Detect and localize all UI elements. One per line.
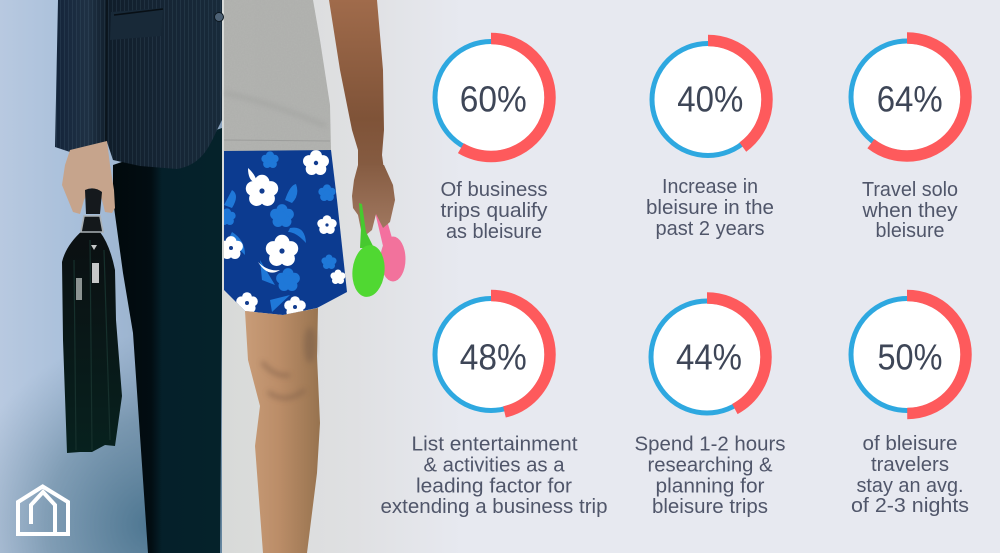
green toy scoop — [350, 203, 387, 299]
left hand — [62, 141, 115, 214]
icon: house logo — [18, 486, 68, 534]
caption 40%: past 2 years — [656, 218, 764, 240]
caption 48%: extending a business trip — [380, 496, 608, 518]
caption 40%: bleisure in the — [646, 197, 774, 219]
blue wall — [0, 0, 222, 553]
caption 50%: of 2-3 nights — [851, 495, 969, 517]
ring 60% — [432, 38, 550, 156]
jacket pocket — [110, 8, 163, 40]
white flowers — [219, 150, 346, 317]
value 64%: 64% — [877, 78, 943, 120]
caption 60%: Of business — [440, 179, 548, 201]
right arm — [329, 0, 384, 170]
stat: 44% — [634, 298, 786, 518]
suit jacket — [55, 0, 224, 169]
caption 44%: Spend 1-2 hours — [634, 434, 786, 456]
value 60%: 60% — [460, 78, 527, 120]
caption 48% — [380, 434, 608, 518]
value 44%: 44% — [676, 336, 742, 377]
caption 64%: when they — [861, 200, 958, 222]
caption 50%: travelers — [871, 454, 949, 476]
briefcase — [62, 188, 122, 453]
stat: 48% — [380, 296, 608, 518]
jacket button — [214, 12, 224, 22]
caption 64%: bleisure — [876, 220, 944, 242]
caption 40%: Increase in — [662, 176, 758, 198]
caption 44%: bleisure trips — [652, 496, 768, 518]
caption 50%: stay an avg. — [856, 475, 964, 497]
caption 50%: of bleisure — [862, 433, 958, 455]
photo: business and beach halves — [0, 0, 406, 553]
light wall — [222, 0, 462, 553]
caption 44% — [634, 434, 786, 518]
caption 60%: as bleisure — [446, 221, 542, 243]
zipper pulls — [76, 245, 99, 300]
value 48%: 48% — [460, 336, 527, 377]
bare leg — [245, 308, 320, 553]
caption 48%: List entertainment — [412, 434, 578, 456]
stat: 64% — [848, 38, 966, 242]
swim shorts — [218, 150, 349, 317]
caption 60%: trips qualify — [440, 200, 548, 222]
caption 48%: leading factor for — [416, 476, 572, 498]
stat: 40% — [646, 40, 774, 240]
pink toy scoop — [375, 210, 406, 282]
ring 50% — [848, 296, 966, 414]
caption 64% — [861, 179, 958, 242]
stat: 50% — [848, 296, 969, 517]
caption 48%: & activities as a — [424, 454, 565, 476]
caption 44%: planning for — [656, 476, 765, 498]
caption 50% — [851, 433, 969, 517]
ring 64% — [848, 38, 966, 156]
value 40%: 40% — [677, 78, 743, 120]
trousers — [113, 128, 222, 553]
caption 44%: researching & — [648, 454, 773, 476]
caption 40% — [646, 176, 774, 240]
ring 48% — [432, 296, 550, 414]
caption 64%: Travel solo — [862, 179, 958, 201]
t-shirt — [224, 0, 334, 152]
stat: 60% — [432, 38, 550, 243]
flower centers — [229, 161, 329, 309]
value 50%: 50% — [878, 336, 942, 377]
right hand — [352, 165, 395, 235]
ring 40% — [649, 40, 767, 158]
blue flowers — [218, 151, 337, 312]
caption 60% — [440, 179, 548, 243]
ring 44% — [648, 298, 766, 416]
